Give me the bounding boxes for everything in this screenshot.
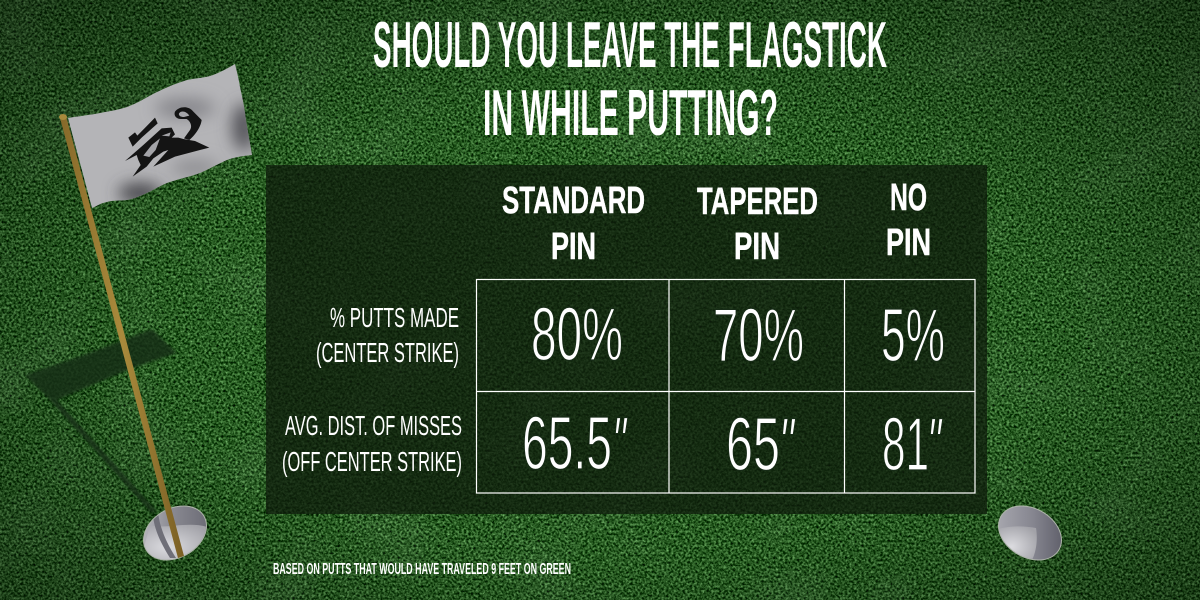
row labels: AVG. DIST. OF MISSES [285, 410, 462, 441]
row labels: (OFF CENTER STRIKE) [282, 446, 462, 477]
right golf hole [998, 506, 1062, 560]
table values: 81 [882, 402, 929, 486]
table values: 80% [531, 292, 623, 376]
flag shadow on the green [25, 329, 177, 514]
footnote: BASED ON PUTTS THAT WOULD HAVE TRAVELED 9 FEET ON GREEN [273, 561, 571, 578]
column headings [502, 177, 931, 268]
table values [522, 292, 946, 486]
table values: " [607, 401, 631, 485]
column headings: TAPERED [697, 181, 818, 223]
table values: " [774, 402, 799, 486]
row labels [282, 302, 462, 477]
table grid [476, 280, 975, 493]
row labels: (CENTER STRIKE) [316, 337, 459, 368]
table values: 70% [713, 293, 804, 377]
icon: golf club logo [125, 107, 209, 177]
column headings: PIN [734, 226, 780, 268]
table values: 65 [726, 402, 780, 486]
column headings: NO [890, 177, 927, 219]
table values: 5% [881, 293, 945, 377]
title: IN WHILE PUTTING? [483, 76, 778, 149]
panel: comparison table [266, 165, 987, 514]
column headings: PIN [551, 226, 596, 268]
title [373, 8, 887, 149]
table values: 65.5 [522, 401, 612, 485]
column headings: STANDARD [502, 180, 645, 222]
flag with logo [68, 64, 252, 208]
table values: " [922, 402, 946, 486]
flagstick [59, 114, 184, 558]
column headings: PIN [886, 222, 931, 264]
left golf hole with flagstick base [143, 506, 207, 560]
row labels: % PUTTS MADE [330, 302, 459, 333]
